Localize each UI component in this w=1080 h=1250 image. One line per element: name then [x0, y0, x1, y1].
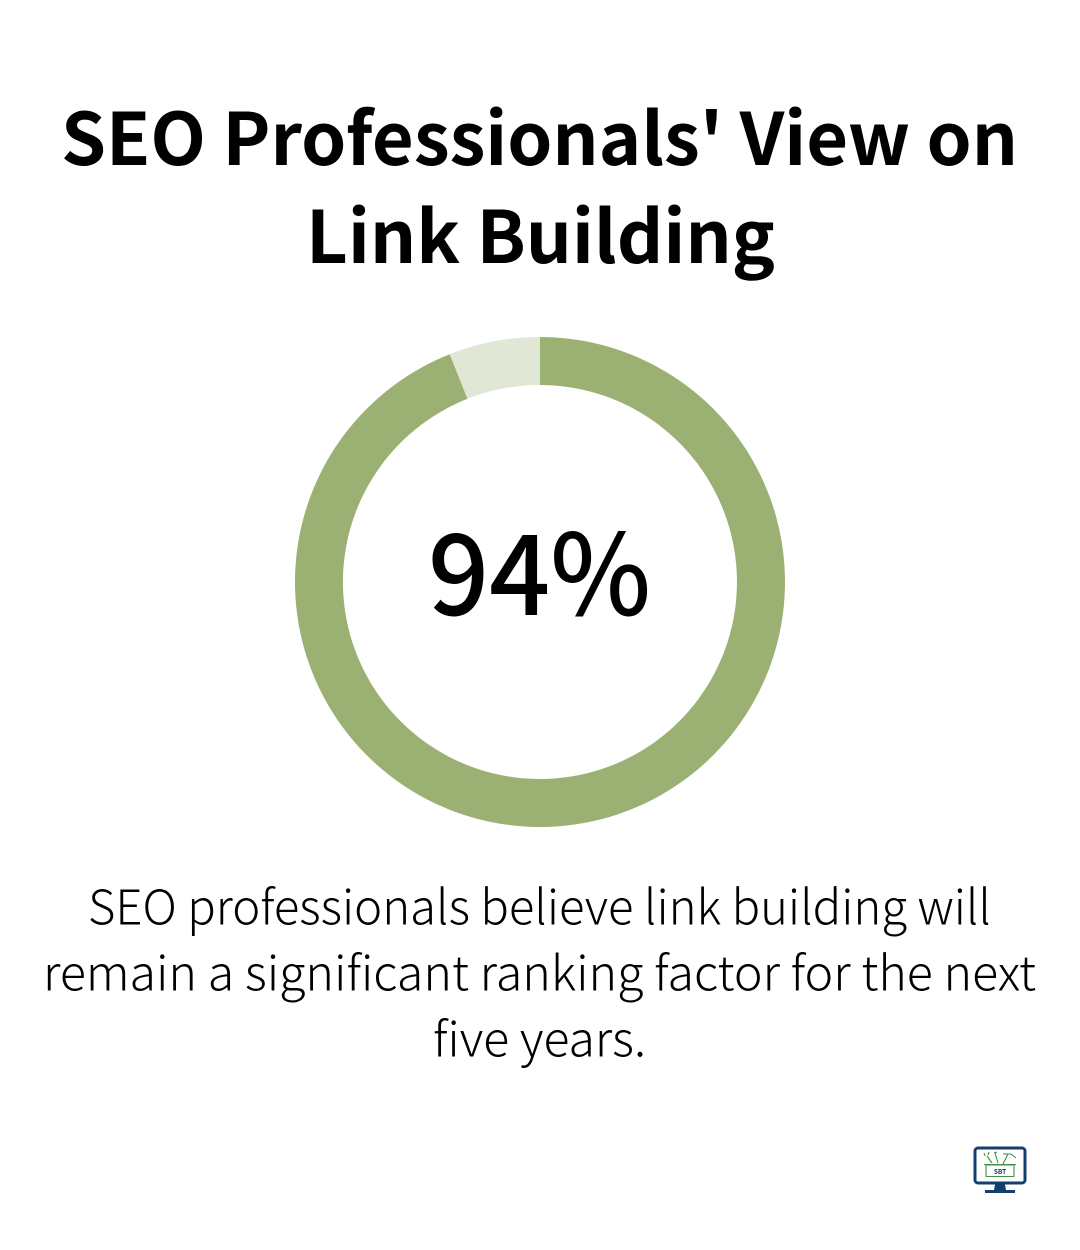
- description text: remain a significant ranking factor for the next: [43, 934, 1036, 1004]
- center value: 94%: [428, 486, 651, 648]
- ring segment: 94% share: [295, 337, 785, 827]
- ring segment: remaining 6%: [450, 337, 540, 399]
- monitor stand: [985, 1184, 1015, 1193]
- logo text: SBT: [994, 1166, 1006, 1176]
- title: Link Building: [306, 179, 775, 284]
- title: [61, 81, 1018, 284]
- description text: [43, 868, 1036, 1070]
- title: SEO Professionals' View on: [61, 81, 1018, 186]
- description text: SEO professionals believe link building will: [88, 868, 991, 938]
- icon: monitor logo with toolbox: [975, 1148, 1025, 1193]
- donut chart: 94%: [295, 337, 785, 827]
- monitor screen: [975, 1148, 1025, 1183]
- toolbox and tools: [984, 1152, 1016, 1176]
- description text: five years.: [433, 1000, 646, 1070]
